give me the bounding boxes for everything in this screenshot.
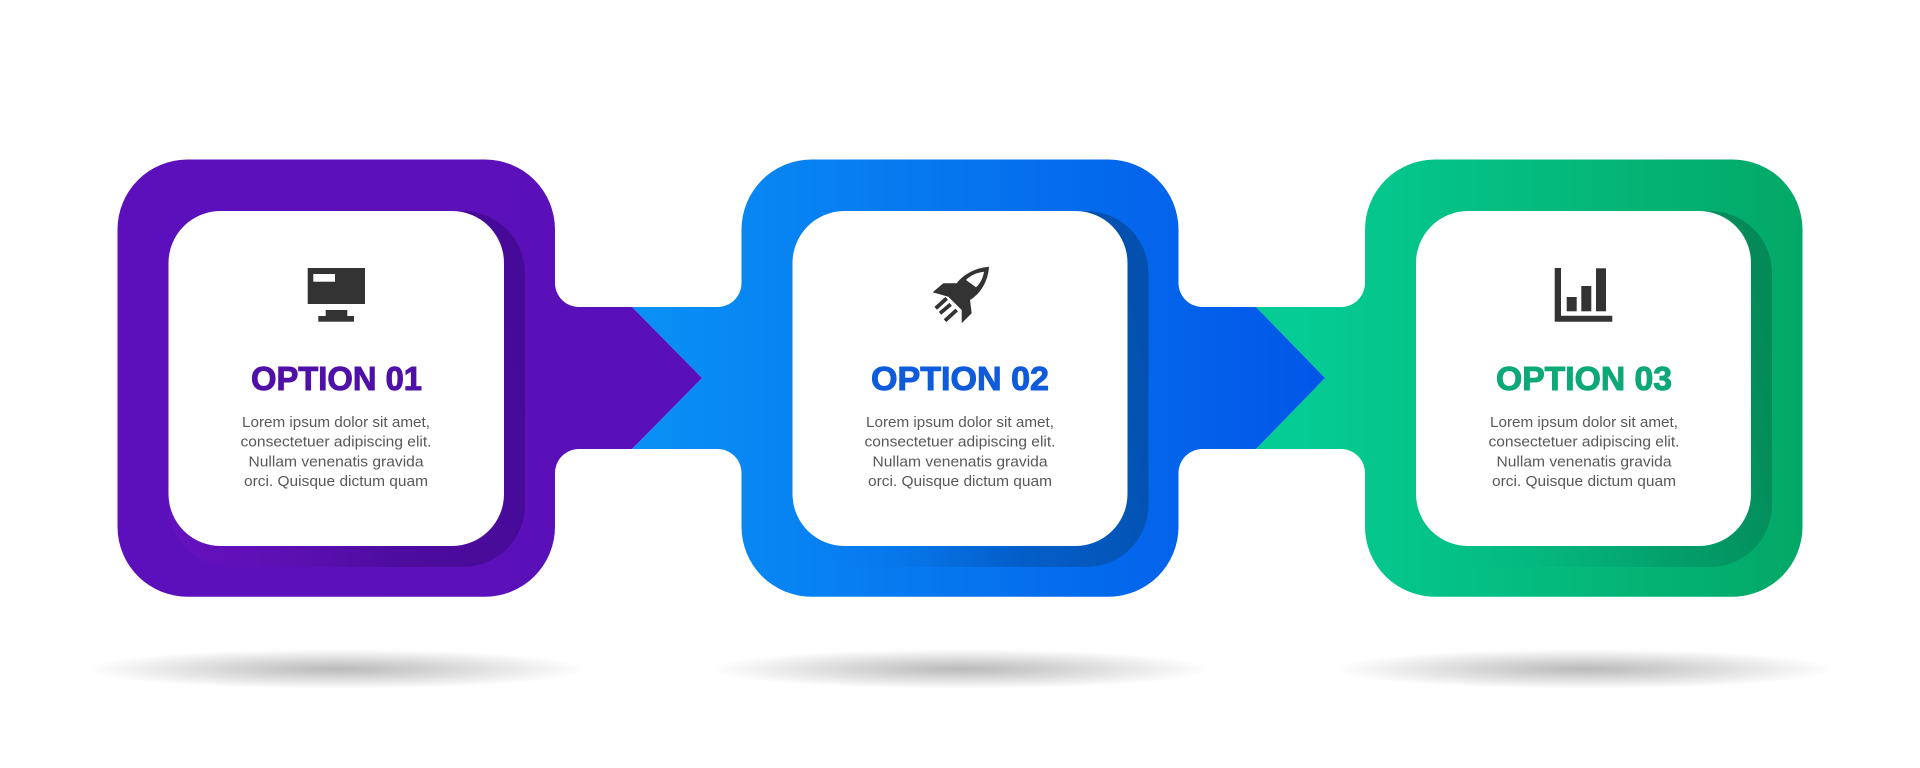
ground shadow 2: [709, 649, 1213, 689]
body text: consectetuer adipiscing elit.: [1488, 435, 1680, 451]
body text: Nullam venenatis gravida: [872, 454, 1048, 470]
body text: orci. Quisque dictum quam: [868, 474, 1052, 490]
panel: option 02: [632, 160, 1325, 597]
icon: bar chart: [1555, 268, 1612, 322]
purple frame with arrow: [118, 160, 702, 597]
inner depth shadow: [1416, 211, 1772, 567]
heading: OPTION 02: [871, 361, 1049, 398]
panel: option 03: [1256, 160, 1802, 597]
body text: [240, 415, 432, 490]
body text: Lorem ipsum dolor sit amet,: [242, 415, 430, 431]
white card: [792, 211, 1128, 546]
body text: orci. Quisque dictum quam: [1492, 474, 1676, 490]
body text: Nullam venenatis gravida: [1496, 454, 1672, 470]
inner depth shadow: [168, 211, 525, 567]
blue frame with chevron notch and arrow: [632, 160, 1325, 597]
ground shadow 1: [85, 649, 589, 689]
body text: consectetuer adipiscing elit.: [240, 435, 432, 451]
icon: monitor: [308, 268, 365, 322]
body text: Lorem ipsum dolor sit amet,: [866, 415, 1054, 431]
body text: Nullam venenatis gravida: [248, 454, 424, 470]
body text: Lorem ipsum dolor sit amet,: [1490, 415, 1678, 431]
white card: [168, 211, 504, 546]
body text: [1488, 415, 1680, 490]
body text: consectetuer adipiscing elit.: [864, 435, 1056, 451]
body text: orci. Quisque dictum quam: [244, 474, 428, 490]
inner depth shadow: [792, 211, 1148, 567]
heading: OPTION 03: [1496, 361, 1672, 398]
green frame with chevron notch: [1256, 160, 1802, 597]
icon: rocket: [933, 267, 989, 323]
ground shadow 3: [1333, 649, 1837, 689]
heading: OPTION 01: [251, 361, 422, 398]
panel: option 01: [118, 160, 702, 597]
body text: [864, 415, 1056, 490]
white card: [1416, 211, 1751, 546]
